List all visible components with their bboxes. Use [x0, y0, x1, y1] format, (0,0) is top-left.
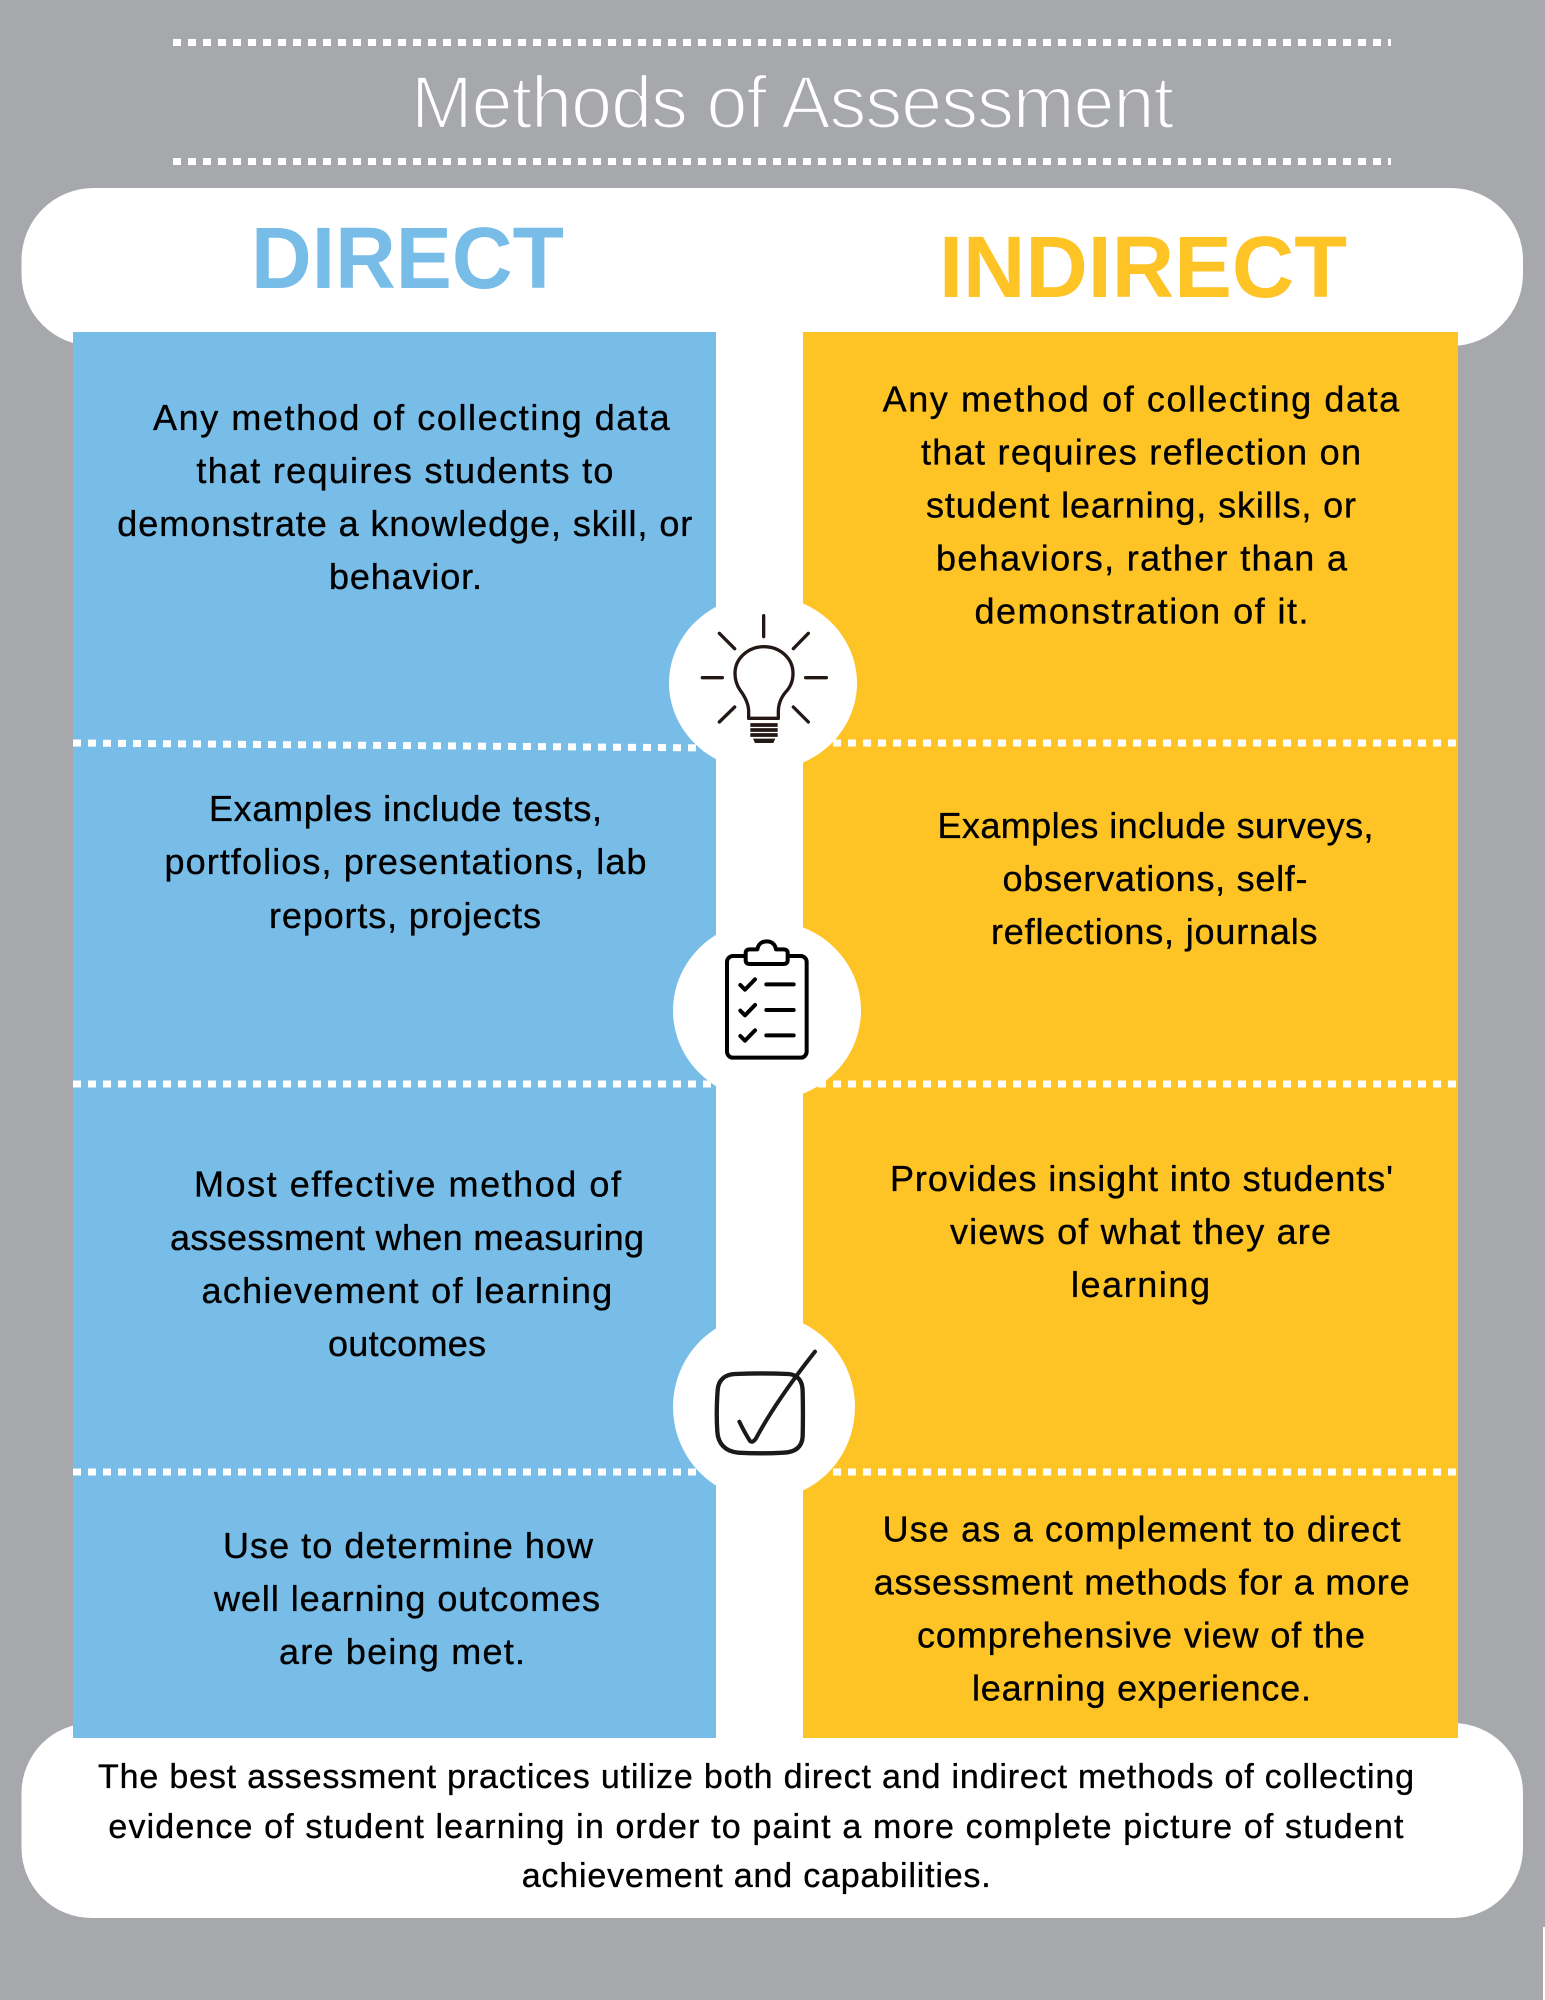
text: direct use: are being met.: [279, 1631, 525, 1672]
text: indirect insight: Provides insight into students': [890, 1158, 1393, 1199]
text: direct effectiveness: outcomes: [328, 1323, 486, 1364]
text: footer summary: evidence of student learning in order to paint a more complete picture of student: [108, 1808, 1404, 1846]
text: indirect use: Use as a complement to direct: [883, 1508, 1401, 1550]
text: footer summary: The best assessment practices utilize both direct and indirect methods of collecting: [98, 1758, 1414, 1796]
text: direct use: [213, 1525, 600, 1672]
icon: light bulb: [669, 595, 857, 771]
text: direct examples: Examples include tests,: [209, 788, 602, 829]
text: direct use: well learning outcomes: [213, 1578, 600, 1619]
text: footer summary: achievement and capabilities.: [522, 1857, 991, 1895]
panel: indirect column: [803, 332, 1458, 1738]
text: direct examples: reports, projects: [269, 895, 541, 936]
text: direct definition: demonstrate a knowledge, skill, or: [117, 503, 692, 544]
text: footer summary: [98, 1758, 1414, 1895]
text: indirect examples: Examples include surveys,: [938, 805, 1374, 846]
text: direct effectiveness: [170, 1164, 644, 1364]
text: indirect use: comprehensive view of the: [917, 1614, 1365, 1656]
text: indirect definition: student learning, skills, or: [926, 484, 1356, 526]
text: direct effectiveness: Most effective method of: [194, 1164, 622, 1204]
text: direct effectiveness: assessment when measuring: [170, 1217, 644, 1258]
text: direct definition: that requires students to: [196, 450, 613, 491]
text: indirect examples: reflections, journals: [991, 911, 1318, 952]
text: indirect definition: [883, 378, 1400, 632]
panel: direct column: [73, 332, 716, 1738]
text: indirect insight: views of what they are: [950, 1211, 1331, 1252]
text: indirect definition: Any method of collecting data: [883, 378, 1400, 420]
text: direct effectiveness: achievement of learning: [202, 1270, 612, 1311]
text: indirect examples: observations, self-: [1002, 858, 1308, 899]
footer band: [22, 1723, 1523, 1918]
text: indirect use: assessment methods for a more: [874, 1562, 1410, 1602]
header band: [22, 188, 1523, 346]
text: direct examples: portfolios, presentations, lab: [164, 841, 646, 882]
text: indirect definition: behaviors, rather than a: [936, 538, 1348, 578]
text: indirect insight: [890, 1158, 1393, 1305]
text: direct definition: behavior.: [329, 556, 482, 597]
text: indirect use: learning experience.: [972, 1668, 1311, 1708]
icon: checked box: [673, 1314, 855, 1500]
title block: Methods of Assessment: [411, 61, 1174, 144]
text: direct use: Use to determine how: [223, 1525, 594, 1566]
text: direct examples: [164, 788, 646, 936]
text: indirect use: [874, 1508, 1410, 1708]
heading: direct: DIRECT: [251, 210, 564, 307]
text: direct definition: [117, 397, 692, 597]
text: indirect examples: [938, 805, 1374, 952]
heading: indirect: INDIRECT: [939, 219, 1347, 316]
text: indirect definition: that requires reflection on: [921, 432, 1361, 472]
text: indirect insight: learning: [1071, 1264, 1210, 1305]
text: indirect definition: demonstration of it.: [974, 590, 1308, 632]
icon: clipboard checklist: [673, 920, 861, 1100]
text: direct definition: Any method of collecting data: [153, 397, 671, 438]
